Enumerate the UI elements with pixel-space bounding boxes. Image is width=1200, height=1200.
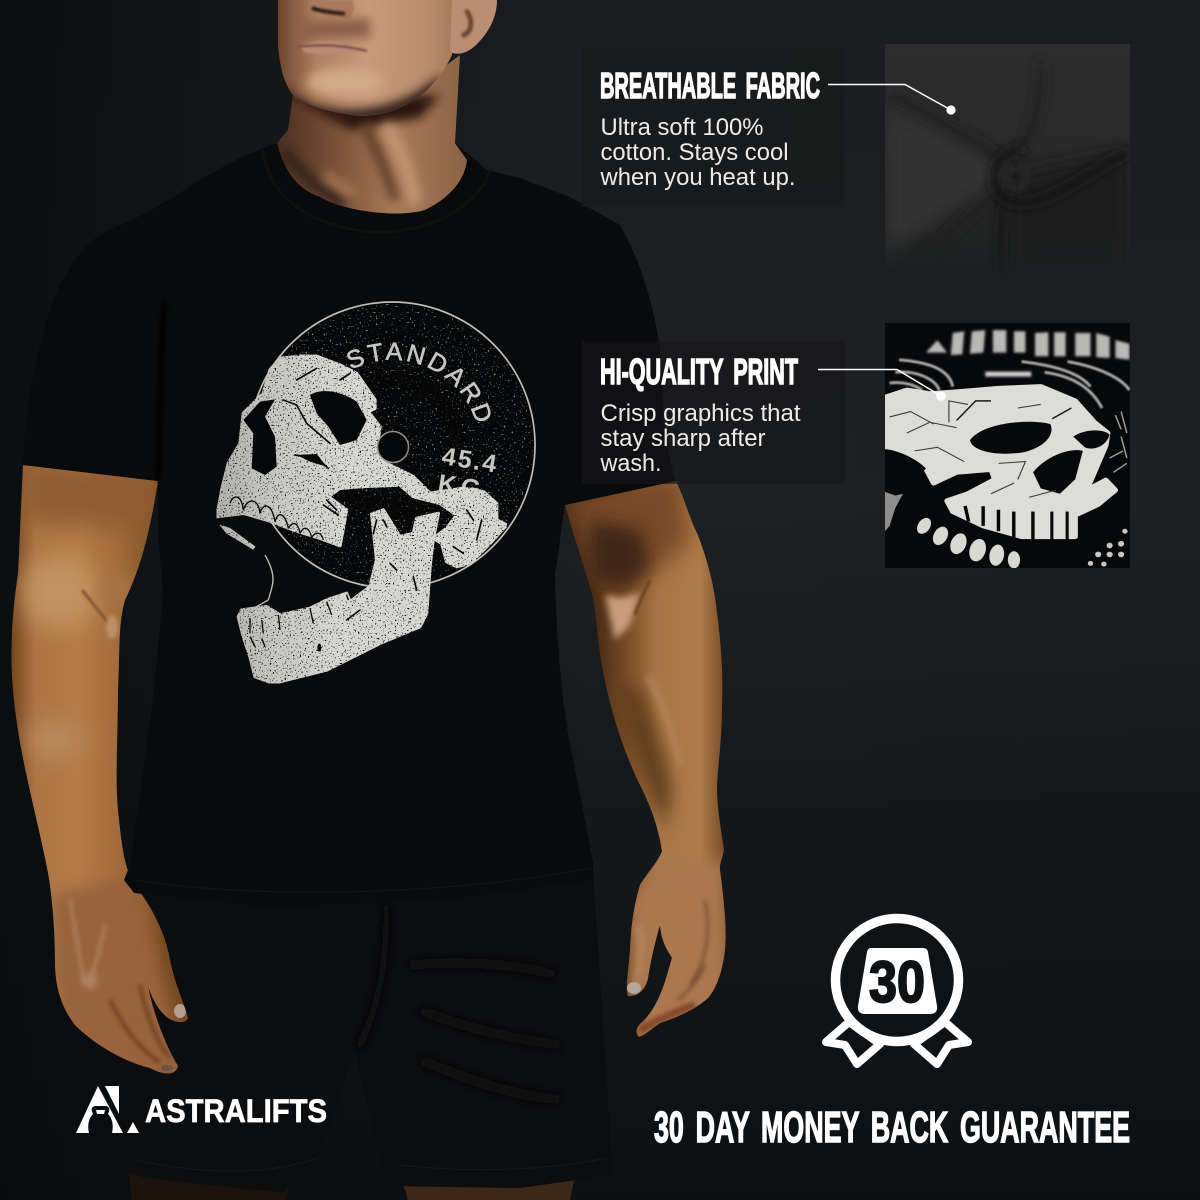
jaw shadow [286,70,442,116]
right arm [565,481,726,1037]
text: print description: wash. [600,450,662,477]
heading: breathable fabric: BREATHABLE FABRIC [600,65,820,106]
skull [885,387,1115,537]
face [278,0,452,116]
skull and weight plate print [216,301,536,684]
plate text: STANDARD [347,342,491,422]
neck [277,55,467,214]
text: fabric description: Ultra soft 100% [600,114,764,141]
text: print description [600,400,801,477]
skull dark details [230,368,482,652]
heading: hi-quality print: HI-QUALITY PRINT [600,351,798,392]
upper teeth [963,506,1069,540]
ear [450,0,497,54]
plate text: 45.4 [440,442,500,479]
icon: 30 day badge: 30 [869,950,925,1015]
t-shirt [23,143,676,907]
plate text: KG [436,469,487,504]
skull bone [217,355,507,683]
plate text [347,342,500,504]
print close-up photo [885,323,1130,568]
text: fabric description: when you heat up. [600,164,796,191]
ribbons [826,1022,968,1064]
text: print description: Crisp graphics that [600,400,801,427]
lower teeth [914,516,1020,568]
halftone dots [1088,529,1128,567]
legs [128,1170,575,1200]
lips [299,41,367,54]
text: fabric description [600,114,796,191]
callout connector: fabric [828,84,956,115]
logo mark [76,1086,139,1133]
panel: hi-quality print text [582,341,845,484]
callout connector: print [818,370,946,401]
icon: 30 day badge [826,918,968,1064]
weight plate [249,302,535,588]
collar band [262,150,490,232]
fabric close-up photo [885,44,1130,254]
model figure [12,0,726,1200]
shorts [118,870,612,1193]
text: fabric description: cotton. Stays cool [600,139,788,166]
plate centre hole [378,432,408,462]
nose [318,0,354,18]
text: print description: stay sharp after [600,425,766,452]
panel: breathable fabric text [582,48,844,207]
logo wordmark: ASTRALIFTS [145,1093,327,1129]
left arm [12,465,188,1074]
logo: astralifts [76,1086,327,1133]
chin light [307,68,383,96]
lettering blur [926,330,1130,377]
